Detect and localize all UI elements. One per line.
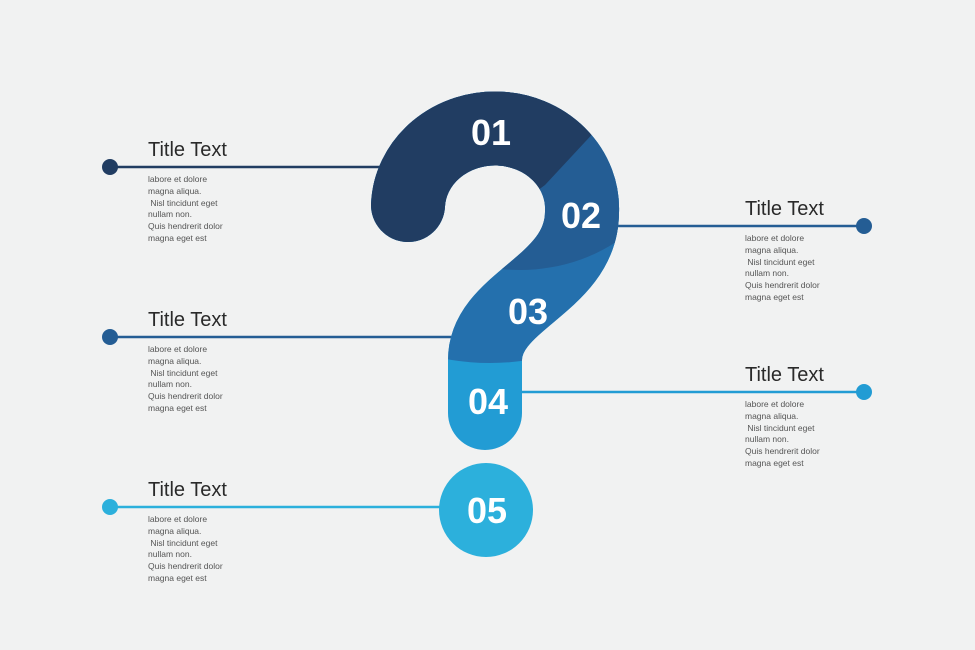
text: labore et dolore magna aliqua. Nisl tincidunt eget nullam non. Quis hendrerit dolor magna eget est: [148, 514, 223, 583]
connector lines: [110, 167, 864, 507]
numbers: 01: [471, 112, 511, 153]
text: labore et dolore magna aliqua. Nisl tincidunt eget nullam non. Quis hendrerit dolor magna eget est: [745, 399, 820, 468]
numbers: 03: [508, 291, 548, 332]
text: Title Text: [148, 309, 227, 331]
right block 1: [745, 198, 824, 302]
text: labore et dolore magna aliqua. Nisl tincidunt eget nullam non. Quis hendrerit dolor magna eget est: [148, 344, 223, 413]
text: Title Text: [148, 139, 227, 161]
numbers: 04: [468, 381, 508, 422]
numbers: [467, 112, 601, 531]
diagram: [102, 92, 872, 557]
left block 2: [148, 309, 227, 413]
question mark: [408, 128, 582, 413]
numbers: 05: [467, 490, 507, 531]
left block 1: [148, 139, 227, 243]
numbers: 02: [561, 195, 601, 236]
left block 3: [148, 479, 227, 583]
text: Title Text: [148, 479, 227, 501]
text: Title Text: [745, 364, 824, 386]
text: labore et dolore magna aliqua. Nisl tincidunt eget nullam non. Quis hendrerit dolor magna eget est: [148, 174, 223, 243]
text: labore et dolore magna aliqua. Nisl tincidunt eget nullam non. Quis hendrerit dolor magna eget est: [745, 233, 820, 302]
text: Title Text: [745, 198, 824, 220]
dots: [102, 159, 872, 515]
right block 2: [745, 364, 824, 468]
circle 05: [439, 463, 533, 557]
